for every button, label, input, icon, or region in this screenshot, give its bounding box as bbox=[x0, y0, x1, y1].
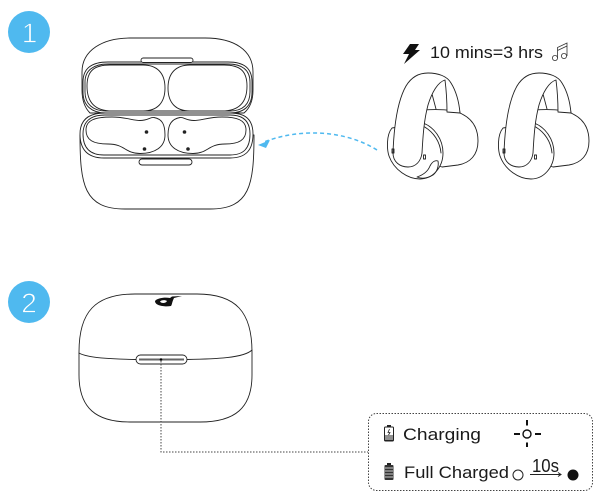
status legend panel bbox=[368, 414, 592, 490]
step 1 badge: 1 bbox=[22, 18, 37, 48]
lid right pocket bbox=[168, 65, 247, 111]
case seam bbox=[79, 350, 252, 360]
fast charge text: 10 mins=3 hrs bbox=[430, 43, 543, 62]
dotted leader line bbox=[161, 361, 368, 452]
base left ear pocket bbox=[86, 117, 165, 154]
icon: blinking light bbox=[514, 420, 541, 447]
open charging case bbox=[80, 38, 254, 209]
left earbud bbox=[387, 73, 478, 179]
status light pill bbox=[136, 355, 187, 364]
10s arrow: 10s bbox=[532, 456, 559, 476]
case base bbox=[80, 135, 254, 209]
icon: full battery bbox=[384, 463, 394, 480]
icon: music notes bbox=[552, 43, 567, 61]
icon: empty light bbox=[513, 470, 523, 480]
icon: charging battery bbox=[384, 425, 394, 441]
base front tab bbox=[139, 159, 192, 165]
full charged label: Full Charged bbox=[404, 463, 509, 482]
touch area bbox=[417, 161, 438, 178]
lid left pocket bbox=[87, 65, 165, 111]
base rim bbox=[80, 113, 253, 158]
lid top tab bbox=[141, 58, 193, 62]
dashed arrow bbox=[258, 133, 377, 150]
charging contacts bbox=[143, 130, 190, 151]
base right ear pocket bbox=[168, 117, 246, 154]
closed charging case bbox=[79, 294, 252, 422]
step 2 badge bbox=[8, 281, 50, 323]
right earbud bbox=[498, 73, 589, 179]
logo bbox=[155, 296, 182, 306]
step 2 badge: 2 bbox=[21, 288, 37, 318]
step 1 badge bbox=[8, 11, 50, 53]
case lid bbox=[82, 38, 253, 113]
icon: lightning bbox=[403, 44, 420, 64]
icon: solid light bbox=[568, 470, 578, 480]
charging label: Charging bbox=[403, 425, 481, 444]
lid rim bbox=[83, 62, 252, 113]
